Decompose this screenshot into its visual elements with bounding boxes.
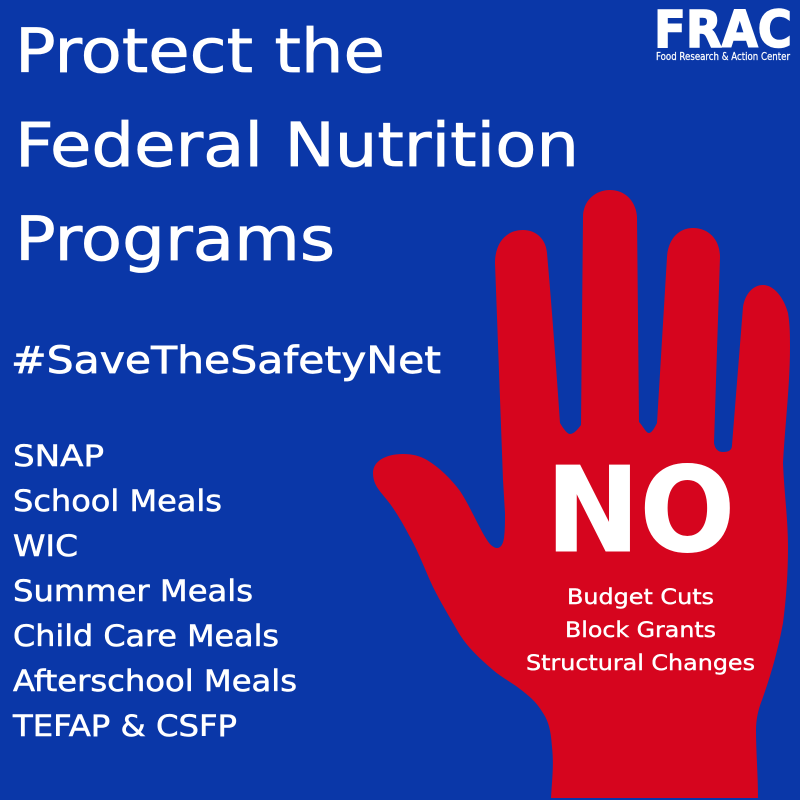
list of nutrition programs [12,439,297,743]
list of nutrition programs: School Meals [13,484,222,518]
list of things opposed: Structural Changes [526,651,755,676]
list of nutrition programs: SNAP [13,439,104,473]
big NO label: NO [546,441,735,579]
list of nutrition programs: Child Care Meals [13,619,279,653]
list of nutrition programs: TEFAP & CSFP [12,709,237,743]
list of things opposed [526,585,755,676]
list of things opposed: Block Grants [565,618,716,643]
title: Protect the [15,16,385,87]
hashtag: #SaveTheSafetyNet [11,339,441,382]
list of nutrition programs: Afterschool Meals [13,664,297,698]
title [15,16,579,275]
list of nutrition programs: Summer Meals [13,574,253,608]
list of things opposed: Budget Cuts [567,585,714,610]
title: Programs [15,204,335,275]
title: Federal Nutrition [15,110,579,181]
icon: red stop hand [373,190,790,798]
list of nutrition programs: WIC [13,529,78,563]
